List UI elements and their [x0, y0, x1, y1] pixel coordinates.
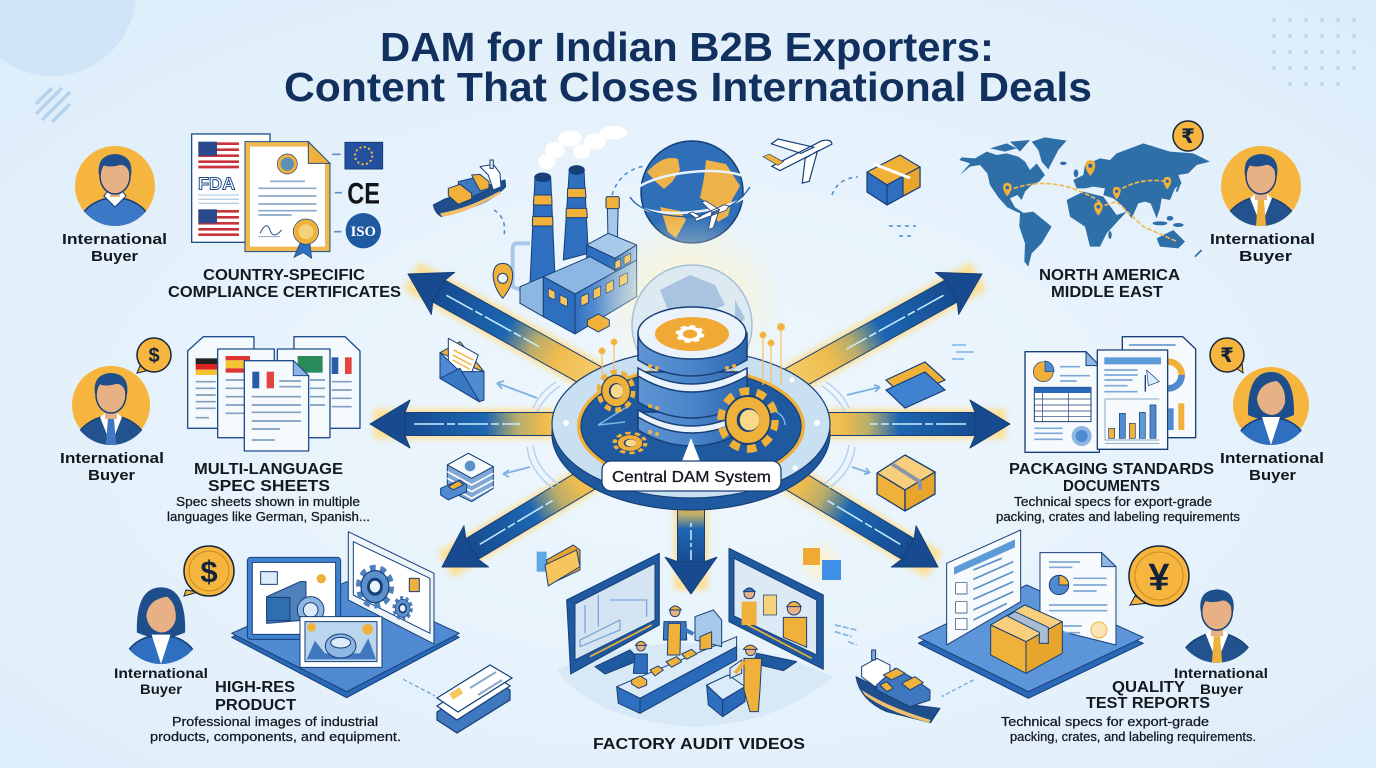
table document — [1025, 352, 1099, 452]
glass dome — [632, 265, 752, 385]
label: buyer top left: Buyer — [91, 248, 138, 265]
heading: compliance certificates: COMPLIANCE CERTIFICATES — [168, 284, 401, 301]
label: buyer middle left: International — [60, 450, 164, 467]
arrow: right to packaging documents — [800, 400, 1010, 448]
text: packaging description — [996, 495, 1240, 524]
platform — [552, 350, 830, 510]
heading: spec sheets: SPEC SHEETS — [208, 478, 330, 495]
text: packaging description: packing, crates and labeling requirements — [996, 510, 1240, 524]
heading: compliance certificates — [168, 267, 401, 301]
label: buyer bottom right — [1174, 665, 1268, 697]
arrow: left to spec sheets — [370, 400, 590, 448]
label: buyer middle left: Buyer — [88, 467, 135, 484]
product monitor — [247, 557, 341, 639]
arrow: upper right to regional map — [778, 253, 994, 402]
text: quality description: packing, crates, and labeling requirements. — [1010, 730, 1256, 744]
Spanish page — [218, 349, 274, 438]
heading: spec sheets — [194, 461, 343, 495]
heading: quality test reports: TEST REPORTS — [1086, 695, 1210, 712]
French back page — [294, 337, 360, 428]
panel: buyer top right — [1221, 146, 1301, 228]
ISO badge — [346, 213, 381, 248]
panel: spec sheets — [188, 337, 360, 451]
decorative arcs around platform — [527, 382, 855, 488]
text: spec sheets description: Spec sheets shown in multiple — [176, 495, 360, 509]
heading: regions: NORTH AMERICA — [1039, 267, 1180, 284]
decorative dots — [1272, 18, 1356, 86]
label: buyer top left: International — [62, 231, 167, 248]
text: spec sheets description — [167, 495, 370, 524]
icon: rupee bubble — [1210, 338, 1244, 373]
workers — [633, 606, 762, 712]
panel: factory audit videos — [557, 548, 833, 727]
label: Central DAM System — [602, 438, 781, 491]
gear large — [722, 393, 774, 447]
conveyor — [617, 610, 737, 713]
checklist document — [947, 530, 1021, 645]
image card — [300, 617, 382, 667]
arrow: upper left to compliance certificates — [396, 253, 608, 399]
title: Content That Closes International Deals — [284, 64, 1092, 110]
pie document — [1122, 337, 1196, 438]
text: quality description: Technical specs for export-grade — [1001, 715, 1209, 729]
heading: regions — [1039, 267, 1180, 301]
title — [284, 24, 1092, 110]
heading: quality test reports — [1086, 679, 1210, 712]
icon: dashed route arrows top — [494, 166, 916, 236]
text: quality description — [1001, 715, 1256, 744]
icon: dollar bubble — [184, 546, 234, 596]
label: buyer bottom right: International — [1174, 665, 1268, 681]
label: buyer middle right — [1220, 450, 1324, 484]
label: buyer top right: Buyer — [1239, 248, 1292, 265]
panel: world map — [959, 137, 1210, 267]
title: DAM for Indian B2B Exporters: — [380, 24, 994, 70]
icon: rupee bubble: ₹ — [1220, 343, 1234, 367]
icon: yen bubble: ¥ — [1148, 557, 1170, 599]
route pins — [1003, 160, 1171, 216]
icon: yen bubble — [1129, 546, 1189, 606]
arrow: lower left to product images — [430, 443, 626, 588]
icon: envelope — [440, 338, 484, 402]
right monitor — [729, 548, 823, 671]
label: buyer top right — [1210, 231, 1315, 265]
database cylinder — [638, 307, 747, 446]
left monitor — [567, 553, 659, 674]
icon: folder — [537, 545, 580, 586]
panel: buyer middle left — [72, 366, 150, 447]
decorative corner circle — [0, 0, 136, 76]
German page — [188, 337, 254, 428]
label: buyer top right: International — [1210, 231, 1315, 248]
heading: quality test reports: QUALITY — [1112, 679, 1185, 696]
heading: high-res product — [215, 679, 296, 714]
decorative hatch — [36, 88, 70, 122]
icon: paper stack — [437, 665, 512, 733]
label: buyer top left — [62, 231, 167, 265]
EU flag — [332, 142, 383, 232]
label: buyer middle left — [60, 450, 164, 484]
text: packaging description: Technical specs for export-grade — [1014, 495, 1212, 509]
panel: buyer bottom right — [1178, 589, 1256, 665]
cardboard box — [991, 605, 1062, 673]
heading: spec sheets: MULTI-LANGUAGE — [194, 461, 343, 478]
panel: packaging documents — [1025, 337, 1196, 452]
floor shadow — [557, 643, 833, 727]
panel: quality test reports — [918, 530, 1143, 698]
panel: buyer middle right — [1233, 367, 1309, 447]
heading: regions: MIDDLE EAST — [1051, 284, 1163, 301]
heading: packaging documents: PACKAGING STANDARDS — [1009, 461, 1214, 478]
status dots — [648, 364, 736, 436]
trade routes — [1007, 180, 1177, 242]
icon: cargo ship bottom — [835, 625, 940, 723]
label: buyer bottom left: Buyer — [140, 681, 183, 697]
text: spec sheets description: languages like German, Spanish... — [167, 510, 370, 524]
icon: cardboard box right — [877, 455, 935, 511]
icon: shipping container — [867, 155, 920, 205]
icon: glowing cubes — [796, 538, 844, 586]
platform — [918, 585, 1143, 698]
label: buyer bottom right: Buyer — [1200, 681, 1244, 697]
gears — [600, 373, 632, 409]
central DAM system — [552, 265, 830, 510]
French front page — [244, 361, 309, 451]
heading: packaging documents — [1009, 461, 1214, 495]
heading: compliance certificates: COUNTRY-SPECIFIC — [203, 267, 365, 284]
icon: left factory — [493, 126, 637, 334]
icon: cargo ship top left — [433, 160, 506, 217]
chart report — [1040, 553, 1116, 645]
label: buyer bottom left — [114, 665, 208, 697]
label: buyer middle right: Buyer — [1249, 467, 1296, 484]
heading: factory audit videos: FACTORY AUDIT VIDEOS — [593, 736, 805, 753]
icon: dollar bubble small — [137, 338, 171, 373]
heading: packaging documents: DOCUMENTS — [1063, 478, 1160, 495]
document with flags — [192, 134, 270, 242]
label: buyer middle right: International — [1220, 450, 1324, 467]
heading: high-res product: PRODUCT — [215, 697, 296, 714]
text: product description: products, components, and equipment. — [150, 730, 401, 744]
platform — [232, 582, 459, 698]
icon: small arrow left — [497, 381, 880, 477]
icon: rupee coin — [1173, 121, 1203, 151]
arrow: down to factory audit videos — [665, 484, 717, 594]
arrow: lower right to test reports — [754, 443, 950, 588]
icon: document stack left — [441, 453, 493, 502]
gear emblem — [679, 327, 701, 341]
Arabic page — [277, 349, 330, 438]
icon: rupee coin: ₹ — [1181, 124, 1195, 148]
panel: buyer bottom left — [121, 587, 201, 666]
label: Central DAM System: Central DAM System — [612, 469, 771, 486]
panel: high-res product images — [232, 532, 459, 698]
text: product description — [150, 715, 401, 744]
icon: card stack right — [886, 345, 974, 408]
text: product description: Professional images of industrial — [172, 715, 378, 729]
panel: buyer top left — [75, 146, 155, 228]
gold data pins — [599, 324, 784, 385]
certificate — [245, 142, 330, 258]
tilted monitor — [348, 532, 434, 644]
icon: dollar bubble small: $ — [148, 345, 160, 367]
icon: airplane — [759, 121, 842, 194]
heading: high-res product: HIGH-RES — [215, 679, 295, 696]
gear small — [616, 434, 644, 452]
label: buyer bottom left: International — [114, 665, 208, 681]
panel: compliance certificates — [192, 134, 383, 258]
icon: dollar bubble: $ — [200, 554, 218, 589]
workstation — [707, 660, 745, 717]
bar chart document — [1097, 350, 1168, 449]
CE mark: CE — [347, 177, 380, 210]
central glow — [596, 215, 786, 385]
document with flags: FDA — [198, 173, 235, 193]
ISO badge: ISO — [351, 224, 376, 240]
icon: globe with orbit — [628, 141, 756, 243]
